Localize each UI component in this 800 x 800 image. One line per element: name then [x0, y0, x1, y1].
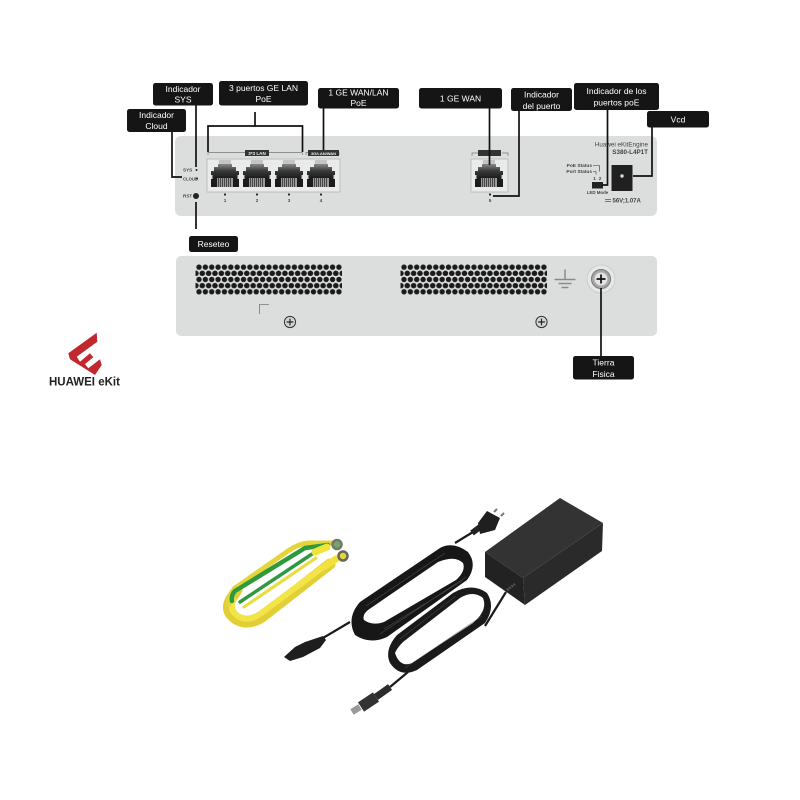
label: Indicador SYS: [153, 83, 213, 106]
panel: back of router: [176, 256, 657, 336]
logo text: HUAWEI eKit: [49, 376, 120, 388]
port: WAN port 5: 5: [489, 198, 492, 203]
vents left: [196, 264, 342, 295]
label: 1 GE WAN: [419, 88, 502, 108]
port group: LAN/WAN ports 1-4: 4: [320, 198, 323, 203]
yellow second strand: [244, 558, 316, 607]
ring terminals: [332, 540, 342, 549]
yellow upper strand: [229, 543, 332, 604]
illustration: grounding cable: [228, 540, 348, 622]
sleeves: [315, 547, 327, 552]
LED mode switch: PoE Status: [567, 163, 592, 169]
label: Indicador Cloud: Cloud: [145, 121, 168, 131]
model text: S380-L4P1T: [612, 149, 648, 156]
status labels: SYS, CLOUD, RST: [183, 168, 199, 199]
vents right: [400, 264, 547, 295]
label: 1 GE WAN: 1 GE WAN: [440, 94, 481, 104]
panel: front of router: [175, 136, 657, 216]
icon: screw left: [284, 316, 296, 328]
LED mode switch: Port Status: [566, 169, 592, 175]
status labels: SYS, CLOUD, RST: SYS: [183, 168, 192, 172]
label: Indicador de los puertos poE: [574, 83, 659, 110]
label: 3 puertos GE LAN PoE: [219, 81, 308, 106]
label: Tierra Fisica: Fisica: [592, 369, 615, 379]
label: Indicador SYS: SYS: [174, 94, 192, 104]
green upper band: [232, 545, 328, 601]
label: Reseteo: Reseteo: [198, 239, 230, 249]
thin cables: [323, 532, 506, 687]
port group: LAN/WAN ports 1-4: 3G/LAN/WAN: [311, 151, 336, 156]
power connector: 56V;1.07A: [612, 198, 642, 204]
label: Indicador de los puertos poE: puertos poE: [594, 98, 640, 108]
label: 1 GE WAN/LAN PoE: [318, 88, 399, 108]
model text: [595, 142, 648, 156]
status labels: SYS, CLOUD, RST: RST: [183, 194, 192, 198]
label: Vcd: Vcd: [671, 114, 686, 124]
icon: ground symbol: [554, 270, 576, 288]
port group: LAN/WAN ports 1-4: 3*3 LAN: [248, 151, 266, 156]
status labels: SYS, CLOUD, RST: CLOUD: [183, 176, 198, 182]
label: Indicador SYS: Indicador: [166, 84, 201, 94]
port: WAN port 5: [471, 150, 508, 203]
yellow lower strand: [228, 564, 330, 622]
illustration: power adapter: [284, 498, 603, 712]
logo: HUAWEI eKit: [49, 333, 120, 388]
IEC connector: [284, 636, 326, 661]
label: Indicador del puerto: Indicador: [524, 90, 559, 100]
label: Indicador Cloud: Indicador: [139, 110, 174, 120]
AC plug: [472, 509, 504, 534]
connector lines: [172, 105, 652, 356]
LED mode switch: [566, 163, 609, 195]
LED mode switch: 2: [599, 176, 602, 181]
icon: screw right: [536, 316, 547, 328]
label: Vcd: [647, 111, 709, 128]
model text: Huawei eKitEngine: [595, 142, 648, 148]
label: Indicador del puerto: del puerto: [523, 101, 561, 111]
power connector: [605, 165, 642, 204]
label: Indicador del puerto: [511, 88, 572, 111]
label: 3 puertos GE LAN PoE: 3 puertos GE LAN: [229, 83, 298, 93]
label: Tierra Fisica: Tierra: [593, 358, 615, 368]
label: Indicador de los puertos poE: Indicador de los: [586, 86, 647, 96]
port group: LAN/WAN ports 1-4: 3: [288, 198, 291, 203]
upper cable coil: [351, 545, 473, 641]
label: 1 GE WAN/LAN PoE: 1 GE WAN/LAN: [328, 88, 389, 98]
icon: red logo mark: [68, 333, 102, 375]
DC plug: [352, 687, 390, 712]
port group: LAN/WAN ports 1-4: 1: [224, 198, 227, 203]
LED mode switch: 1: [593, 176, 596, 181]
corner mark: [260, 304, 269, 314]
label: Tierra Fisica: [573, 356, 634, 380]
icon: ground screw: [587, 265, 615, 293]
port group: LAN/WAN ports 1-4: [207, 150, 340, 203]
adapter box: [485, 498, 603, 605]
label: Reseteo: [189, 236, 238, 252]
lower cable coil: [388, 588, 491, 673]
label: Indicador Cloud: [127, 109, 186, 132]
green second strand: [240, 554, 312, 602]
LED mode switch: LED Mode: [587, 190, 609, 195]
label: 1 GE WAN/LAN PoE: PoE: [350, 98, 367, 108]
port group: LAN/WAN ports 1-4: 2: [256, 198, 259, 203]
label: 3 puertos GE LAN PoE: PoE: [255, 94, 272, 104]
